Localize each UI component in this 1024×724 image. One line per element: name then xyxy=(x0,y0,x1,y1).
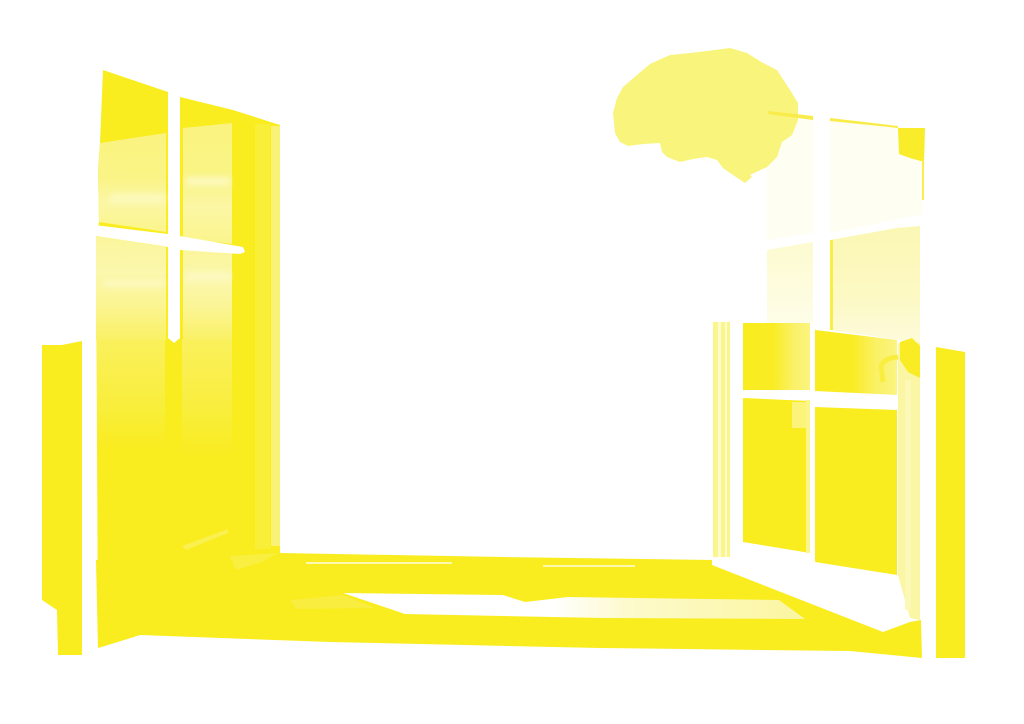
right door: upper right panel xyxy=(815,330,897,395)
right door: pale outer frame xyxy=(898,343,920,620)
left door: upper left pane xyxy=(98,133,166,232)
right door: upper right pane xyxy=(830,118,925,233)
right door: upper left panel xyxy=(743,323,810,390)
right door: lower left panel xyxy=(743,398,810,553)
left door: lower left pane xyxy=(96,236,166,340)
left door: solid body xyxy=(96,70,280,648)
right door: thin side frame xyxy=(713,322,730,557)
floor: thin highlights xyxy=(306,562,452,564)
left door: reflection stripes xyxy=(104,177,230,287)
right wall strip xyxy=(936,347,965,658)
right window door xyxy=(713,118,925,620)
right door: upper left pane xyxy=(767,118,813,240)
left door: base reflection xyxy=(182,529,228,550)
icon: brain xyxy=(613,48,813,183)
right door: mid right pane xyxy=(830,226,920,345)
left door: white mullion xyxy=(168,90,180,343)
left window door xyxy=(95,70,280,648)
floor: light patch xyxy=(343,593,805,619)
left door: white crossbar xyxy=(95,225,245,254)
left door: glass below the sill xyxy=(97,340,165,450)
left wall strip xyxy=(42,341,82,655)
left door: frame highlights xyxy=(255,124,270,549)
right door: mid left pane xyxy=(767,242,813,323)
brain: overlap with window frame xyxy=(768,111,813,120)
left door: lower right pane xyxy=(183,250,232,340)
left door: upper right pane xyxy=(183,123,232,244)
right door: lower right panel xyxy=(815,407,897,575)
right door: handle xyxy=(900,338,920,378)
floor xyxy=(96,553,922,658)
